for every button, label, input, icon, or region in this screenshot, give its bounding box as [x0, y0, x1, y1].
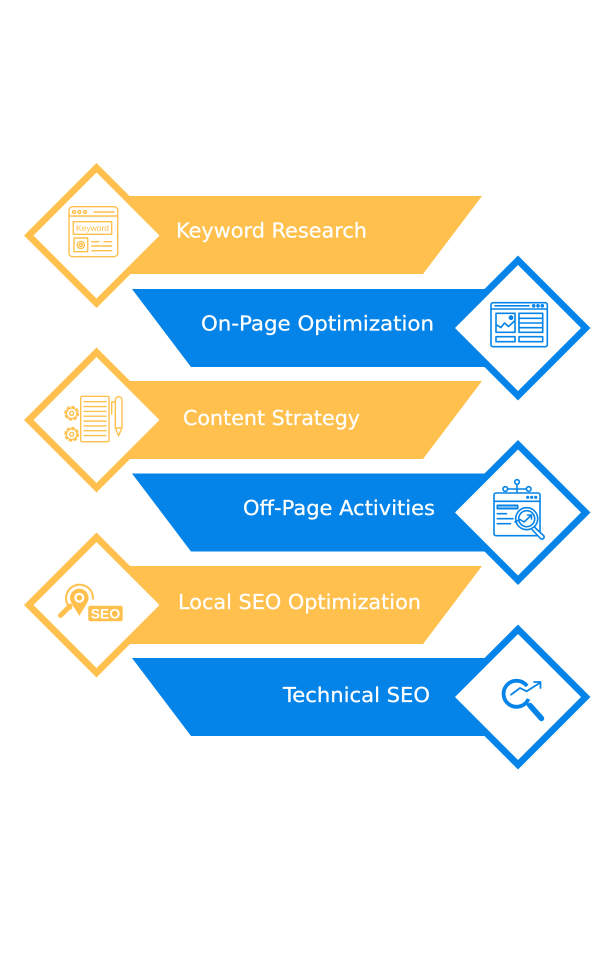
label: Off-Page Activities [243, 496, 435, 520]
icon: page with magnifier [494, 480, 544, 539]
diamond frame [24, 532, 169, 678]
icon: keyword browser: Keyword [76, 223, 109, 233]
panel: Keyword Research [24, 163, 482, 308]
icon: location pin with SEO tag [60, 585, 123, 621]
icon: keyword browser [69, 207, 118, 257]
banner: Content Strategy [100, 381, 482, 459]
panel: On-Page Optimization [132, 256, 590, 400]
banner: Local SEO Optimization [100, 566, 482, 644]
icon: document, gears and pen [65, 396, 122, 442]
label: Local SEO Optimization [178, 590, 421, 614]
icon: web page layout [491, 303, 547, 347]
banner: Keyword Research [100, 196, 482, 274]
banner: Technical SEO [132, 658, 518, 736]
diamond frame [446, 256, 590, 400]
banner: Off-Page Activities [132, 474, 518, 552]
panel: Local SEO Optimization [24, 532, 482, 678]
diamond frame [446, 624, 590, 770]
panel: Content Strategy [24, 348, 482, 492]
banner: On-Page Optimization [132, 289, 518, 367]
label: Technical SEO [282, 683, 430, 707]
icon: location pin with SEO tag: SEO [91, 605, 120, 621]
label: On-Page Optimization [201, 312, 434, 336]
diamond frame [24, 348, 169, 492]
diamond frame [24, 163, 169, 308]
label: Content Strategy [183, 406, 360, 430]
label: Keyword Research [176, 218, 367, 242]
panel: Off-Page Activities [132, 440, 590, 585]
diamond frame [446, 440, 590, 585]
icon: magnifier with growth arrow [504, 681, 542, 718]
panel: Technical SEO [132, 624, 590, 770]
